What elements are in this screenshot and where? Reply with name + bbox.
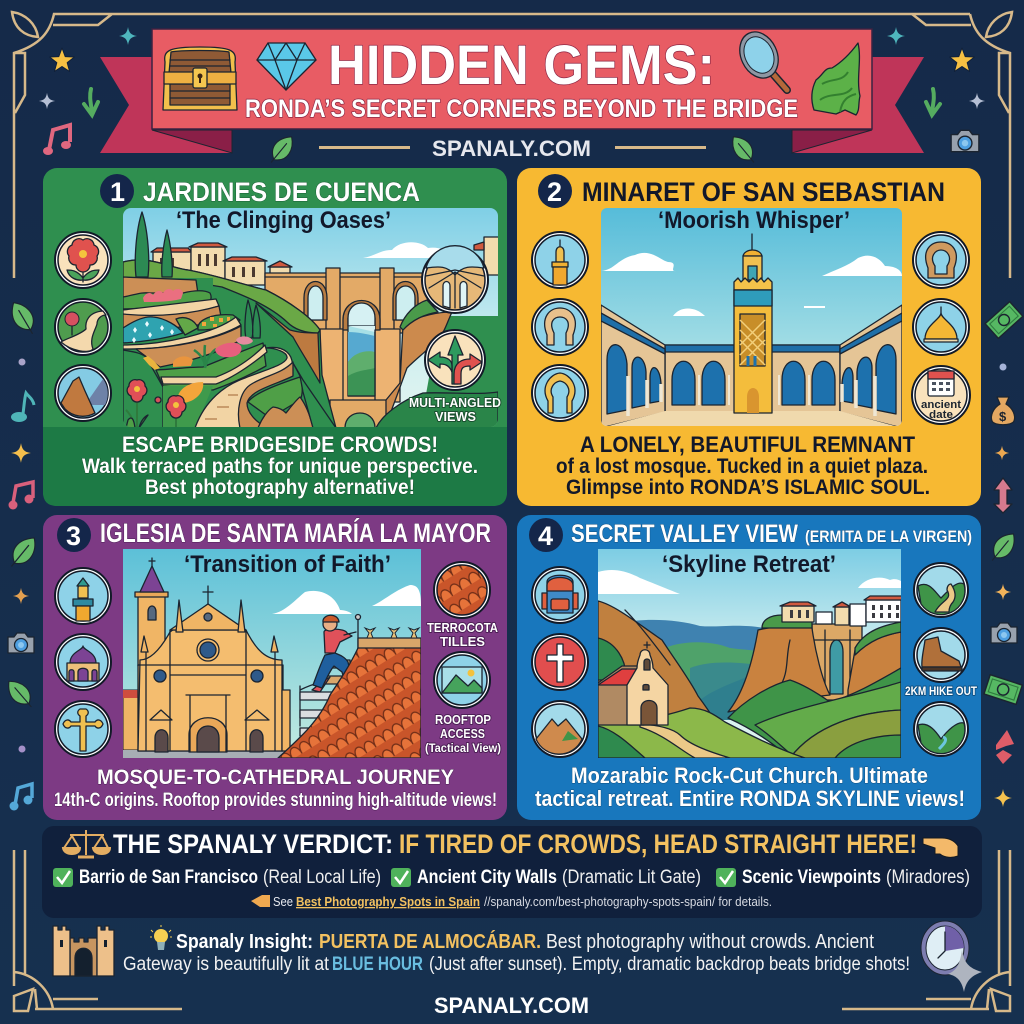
icon: terracotta tiles <box>434 562 490 618</box>
number badge 4 <box>529 518 563 552</box>
subtitle text: RONDA’S SECRET CORNERS BEYOND THE BRIDGE <box>245 95 798 123</box>
description 2: Glimpse into RONDA’S ISLAMIC SOUL. <box>566 476 930 499</box>
insight text <box>123 930 910 975</box>
verdict heading: THE SPANALY VERDICT: <box>113 829 393 859</box>
icon: horseshoe arch <box>532 299 588 355</box>
distant blue mountains <box>636 620 762 650</box>
verdict heading: IF TIRED OF CROWDS, HEAD STRAIGHT HERE! <box>399 829 917 859</box>
green valley slopes <box>598 668 901 758</box>
illustration: terraced gardens and bridge <box>123 208 500 428</box>
item: Ancient City Walls: (Dramatic Lit Gate) <box>562 867 701 888</box>
description 2 <box>556 432 930 499</box>
tagline 2: ‘Moorish Whisper’ <box>658 207 850 234</box>
icon: domed mosque-cathedral <box>55 634 111 690</box>
icon: keyhole arch <box>913 232 969 288</box>
illustration: church and rooftop <box>123 549 421 758</box>
icon: bridge from below <box>422 246 488 313</box>
icon: scales <box>63 830 110 857</box>
details link line: //spanaly.com/best-photography-spots-spain/ for details. <box>484 894 772 909</box>
description 4: tactical retreat. Entire RONDA SKYLINE views! <box>535 786 965 811</box>
icon: leaf right <box>733 137 754 162</box>
icon: bell tower <box>55 568 111 624</box>
left rock and hermitage hill <box>598 600 710 714</box>
item: Scenic Viewpoints <box>716 867 970 888</box>
item: Ancient City Walls <box>391 867 701 888</box>
verdict heading <box>113 829 917 859</box>
website url: SPANALY.COM <box>432 136 591 161</box>
number badge 1 <box>100 174 134 208</box>
panel 3: Iglesia de Santa Maria la Mayor <box>43 515 507 820</box>
town buildings <box>151 237 500 285</box>
number badge 4: 4 <box>538 521 553 551</box>
icon: garden path <box>55 299 111 355</box>
icon: calendar ancient date: date <box>929 409 953 421</box>
garden terraces <box>123 277 267 428</box>
Puente Nuevo bridge <box>265 268 430 428</box>
illustration: valley, hermitage and skyline <box>598 549 902 758</box>
icon: backpack <box>532 567 588 623</box>
icon: mountain <box>55 365 111 421</box>
right margin icons <box>984 302 1023 807</box>
winding path <box>195 347 336 428</box>
tagline 4: ‘Skyline Retreat’ <box>662 551 836 578</box>
header ribbon tails <box>100 57 924 153</box>
description 3: 14th-C origins. Rooftop provides stunning high-altitude views! <box>54 790 497 811</box>
number badge 2 <box>538 174 572 208</box>
hermitage chapel <box>598 642 668 725</box>
description 2: of a lost mosque. Tucked in a quiet plaza. <box>556 455 928 478</box>
item: Barrio de San Francisco: (Real Local Life) <box>263 867 381 888</box>
details link line <box>251 894 772 909</box>
label: rooftop access: ACCESS <box>440 726 485 741</box>
back arcade <box>665 345 840 415</box>
details link line: Best Photography Spots in Spain <box>296 894 480 909</box>
mid valley hills <box>668 642 754 720</box>
right margin icons: $ <box>999 409 1007 424</box>
hillside and cypress trees <box>123 212 336 428</box>
description 4: Mozarabic Rock-Cut Church. Ultimate <box>571 763 928 788</box>
insight text: Gateway is beautifully lit at <box>123 954 330 975</box>
icon: calendar ancient date: ancient <box>921 399 961 411</box>
footer website url: SPANALY.COM <box>434 993 589 1018</box>
label: multi-angled views: VIEWS <box>435 409 476 424</box>
icon: minaret <box>532 232 588 288</box>
bell tower <box>135 558 168 666</box>
description 1 <box>82 432 478 499</box>
title text: HIDDEN GEMS: <box>328 33 715 96</box>
right cliff and greenery <box>376 300 498 428</box>
icon: magnifying glass <box>733 26 787 90</box>
climbing man and spiral stairs <box>300 614 360 736</box>
heading 2: MINARET OF SAN SEBASTIAN <box>582 177 945 207</box>
illustration: minaret and courtyard <box>601 208 902 428</box>
icon: valley trail <box>914 563 968 617</box>
item: Barrio de San Francisco <box>53 867 381 888</box>
icon: diamond <box>257 43 316 90</box>
icon: light bulb <box>150 925 172 950</box>
insight text: BLUE HOUR <box>332 954 423 975</box>
description 1: ESCAPE BRIDGESIDE CROWDS! <box>122 432 438 457</box>
icon: mountains <box>532 701 588 757</box>
label: rooftop access <box>425 712 501 755</box>
number badge 1: 1 <box>110 177 125 207</box>
minaret tower <box>734 234 772 413</box>
description 1: Best photography alternative! <box>145 476 415 499</box>
right arcade in perspective <box>840 305 902 428</box>
icon: green gem stone <box>812 43 860 115</box>
item: Scenic Viewpoints: (Miradores) <box>886 867 970 888</box>
label: 2km hike out: 2KM HIKE OUT <box>905 684 978 698</box>
insight text: (Just after sunset). Empty, dramatic backdrop beats bridge shots! <box>429 954 910 975</box>
top side decorations <box>39 27 985 155</box>
label: multi-angled views: MULTI-ANGLED <box>409 395 501 410</box>
icon: red cross <box>532 634 588 690</box>
details link line: See <box>273 894 293 909</box>
rooftop parapet and tiles <box>278 628 421 758</box>
insight text: Spanaly Insight: <box>176 931 313 953</box>
description 2: A LONELY, BEAUTIFUL REMNANT <box>580 432 916 457</box>
panel 1: Jardines de Cuenca <box>43 168 507 506</box>
number badge 3 <box>57 518 91 552</box>
icon: flower <box>55 232 111 288</box>
label: rooftop access: ROOFTOP <box>435 712 491 727</box>
heading 4 <box>571 520 972 548</box>
title banner <box>152 26 872 129</box>
description 1: Walk terraced paths for unique perspective. <box>82 455 478 478</box>
heading 4: (ERMITA DE LA VIRGEN) <box>805 527 972 546</box>
icon: multi-direction arrows <box>425 330 485 390</box>
icon: leaf left <box>271 137 292 162</box>
description 3 <box>54 766 497 811</box>
icon: hiking boot <box>914 628 968 682</box>
Ronda cliff, bridge and town <box>728 596 902 712</box>
website tagline row <box>271 136 754 162</box>
number badge 2: 2 <box>547 177 562 207</box>
heading 3: IGLESIA DE SANTA MARÍA LA MAYOR <box>100 517 491 548</box>
left arcade in perspective <box>601 305 665 428</box>
heading 1: JARDINES DE CUENCA <box>143 177 420 207</box>
number badge 3: 3 <box>66 521 81 551</box>
foreground flowers <box>126 380 186 428</box>
description 4 <box>535 763 965 811</box>
panel: Spanaly verdict <box>42 826 982 918</box>
left margin icons <box>5 302 40 810</box>
insight text: PUERTA DE ALMOCÁBAR. <box>319 930 541 953</box>
label: terracotta tiles: TILLES <box>440 634 485 649</box>
icon: calendar ancient date <box>912 366 970 424</box>
church facade <box>138 586 290 752</box>
label: terracotta tiles: TERROCOTA <box>427 620 499 635</box>
item: Scenic Viewpoints: Scenic Viewpoints <box>742 867 881 888</box>
heading 4: SECRET VALLEY VIEW <box>571 520 798 548</box>
item: Barrio de San Francisco: Barrio de San Francisco <box>79 867 258 888</box>
label: multi-angled views <box>409 395 501 424</box>
label: rooftop access: (Tactical View) <box>425 741 501 755</box>
icon: clock and sparkle <box>921 921 982 992</box>
panel 2: Minaret of San Sebastian <box>517 168 981 506</box>
tagline 3: ‘Transition of Faith’ <box>184 551 391 578</box>
panel 4: Secret Valley View <box>517 515 981 820</box>
icon: treasure chest <box>163 47 237 110</box>
icon: pointing hand <box>923 838 958 857</box>
insight text: Best photography without crowds. Ancient <box>546 931 874 953</box>
verdict checklist <box>53 867 970 888</box>
icon: dome <box>913 299 969 355</box>
icon: river valley <box>914 702 968 756</box>
icon: lobed arch <box>532 365 588 421</box>
description 3: MOSQUE-TO-CATHEDRAL JOURNEY <box>97 766 454 789</box>
panel: Spanaly insight <box>53 921 982 992</box>
tagline 1: ‘The Clinging Oases’ <box>176 207 391 234</box>
icon: castle gate <box>53 926 114 976</box>
item: Ancient City Walls: Ancient City Walls <box>417 867 557 888</box>
label: terracotta tiles <box>427 620 499 649</box>
icon: cross <box>55 701 111 757</box>
icon: landscape view <box>434 652 490 708</box>
